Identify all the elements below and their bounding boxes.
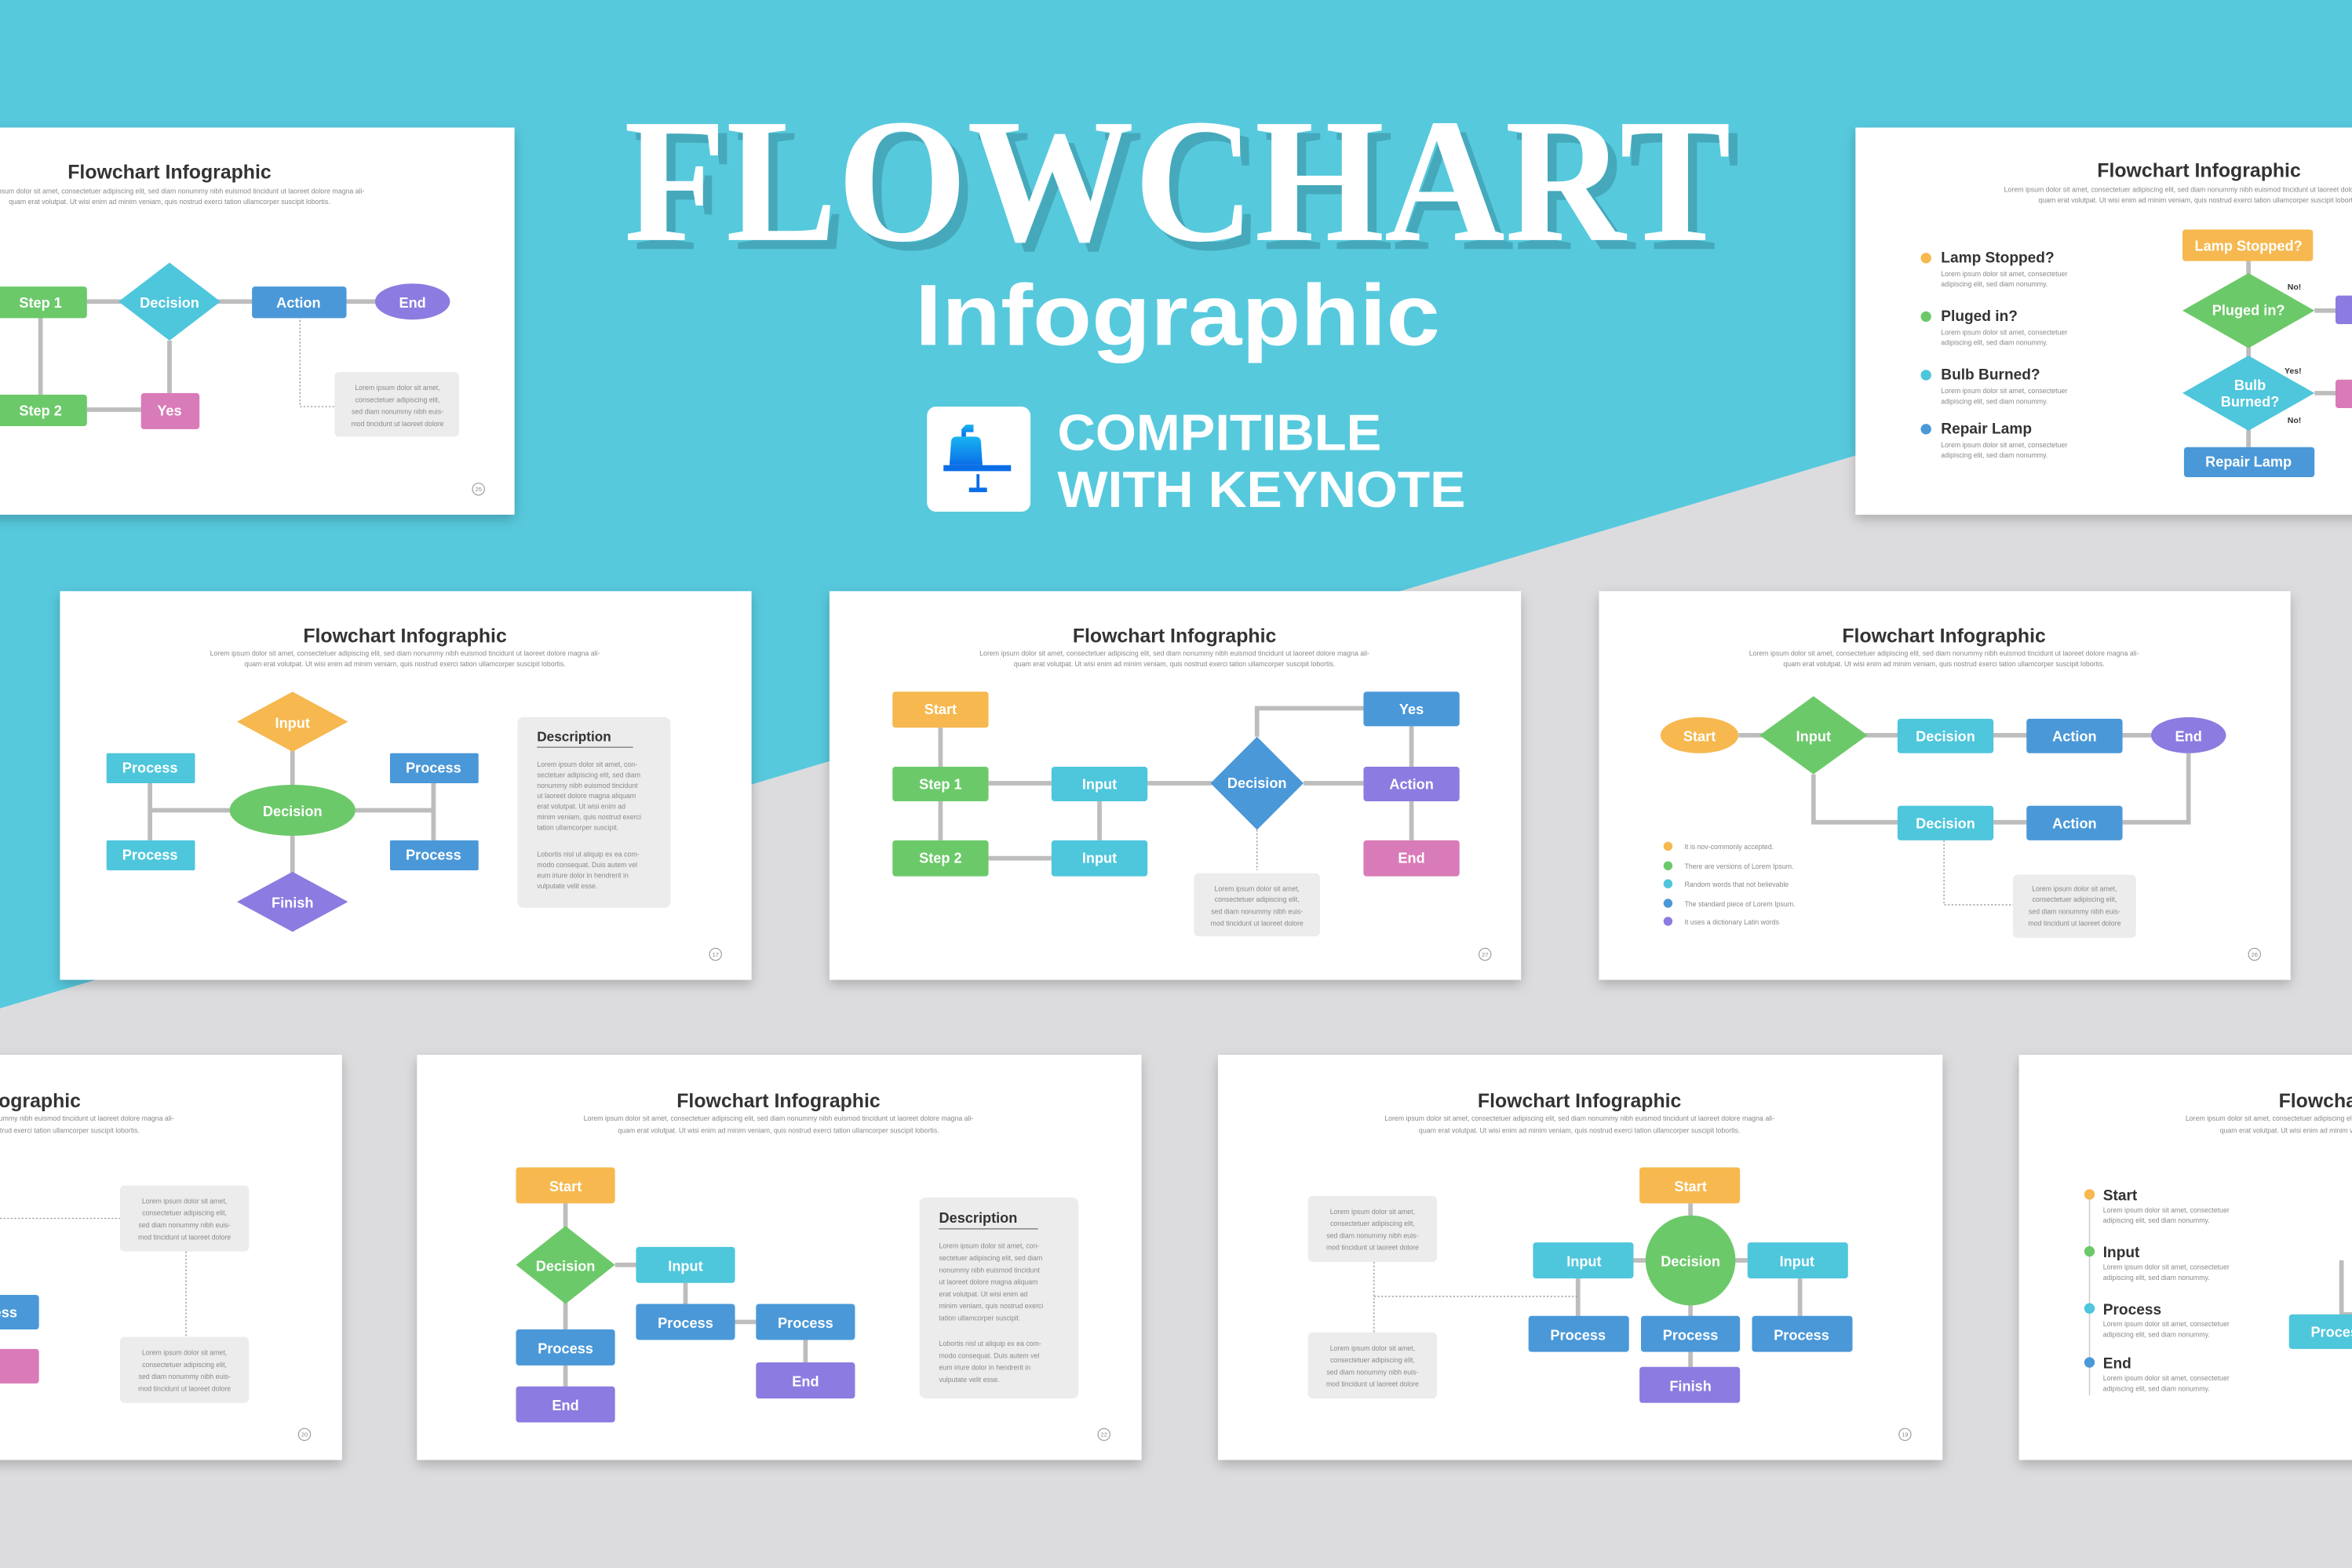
panel: top-right slide: Bulb [2234, 377, 2266, 393]
panel: row3 slide 2 (decision tree with description): eum iriure dolor in hendrerit in [939, 1364, 1030, 1372]
panel: row2 slide 3 (start-end loop) [1599, 591, 2291, 980]
panel: row3 slide 2 (decision tree with description): erat volutpat. Ut wisi enim ad [939, 1290, 1027, 1298]
panel: row3 slide 2 (decision tree with description): Lobortis nisl ut aliquip ex ea com- [939, 1340, 1041, 1347]
panel: row3 slide 1 (partial): 20 [301, 1431, 308, 1439]
panel: row3 slide 1 (partial): mod tincidunt ut laoreet dolore [138, 1384, 231, 1392]
panel: row2 slide 1 (decision hub): Lorem ipsum dolor sit amet, con- [537, 760, 637, 768]
panel: top-right slide: Bulb Burned? [1941, 367, 2040, 384]
panel: row2 slide 3 (start-end loop): Decision [1916, 815, 1975, 831]
panel: row3 slide 3 (decision circle): Flowchart Infographic [1478, 1091, 1682, 1112]
panel: row2 slide 3 (start-end loop): consectetuer adipiscing elit, [2032, 895, 2117, 903]
panel: row2 slide 1 (decision hub): sectetuer adipiscing elit, sed diam [537, 771, 640, 779]
panel: row2 slide 1 (decision hub): minim veniam, quis nostrud exerci [537, 813, 641, 821]
panel: row3 slide 2 (decision tree with description): End [792, 1374, 819, 1390]
panel: row3 slide 4 (partial timeline) [2019, 1055, 2352, 1460]
panel: row2 slide 1 (decision hub): Process [406, 760, 461, 776]
panel: top-right slide: Lorem ipsum dolor sit amet, consectetuer [1941, 270, 2067, 278]
panel: top-left slide: Step 1 [19, 295, 62, 311]
panel: row2 slide 1 (decision hub): modo consequat. Duis autem vel [537, 861, 637, 869]
panel: top-right slide: Pluged in? [1941, 308, 2018, 325]
panel: row3 slide 1 (partial): sed diam nonummy nibh euis- [139, 1221, 231, 1229]
panel: row3 slide 4 (partial timeline): adipiscing elit, sed diam nonummy. [2103, 1331, 2210, 1339]
panel: top-right slide: Flowchart Infographic [2097, 161, 2301, 182]
panel: top-left slide: 25 [475, 486, 482, 493]
panel: row3 slide 2 (decision tree with description): Input [668, 1258, 703, 1274]
panel: row3 slide 2 (decision tree with description): Description [939, 1210, 1017, 1226]
panel: top-right slide: adipiscing elit, sed diam nonummy. [1941, 451, 2048, 459]
panel: row3 slide 3 (decision circle): sed diam nonummy nibh euis- [1326, 1231, 1419, 1239]
panel: row2 slide 2 (steps): Input [1082, 777, 1117, 793]
panel: row2 slide 2 (steps): 27 [1482, 951, 1488, 958]
panel: row2 slide 3 (start-end loop): Action [2052, 729, 2097, 745]
panel: top-left slide: mod tincidunt ut laoreet dolore [351, 420, 444, 428]
panel: row3 slide 2 (decision tree with description): Lorem ipsum dolor sit amet, consectetuer adipiscing elit, sed diam nonummy nibh euismod tincidunt ut laoreet dolore magna ali- [584, 1114, 973, 1122]
panel: row3 slide 2 (decision tree with description): ut laoreet dolore magna aliquam [939, 1278, 1037, 1286]
panel: row2 slide 2 (steps): End [1398, 850, 1425, 866]
panel: row3 slide 3 (decision circle): sed diam nonummy nibh euis- [1326, 1368, 1419, 1376]
panel: row3 slide 4 (partial timeline): End [2103, 1356, 2131, 1373]
panel: row3 slide 1 (partial): consectetuer adipiscing elit, [142, 1361, 227, 1369]
panel: top-right slide: No! [2288, 416, 2301, 425]
panel: row2 slide 2 (steps): consectetuer adipiscing elit, [1215, 895, 1300, 903]
panel: row3 slide 3 (decision circle): Decision [1661, 1254, 1720, 1270]
panel: row3 slide 2 (decision tree with description): Flowchart Infographic [676, 1091, 881, 1112]
panel: top-left slide: Lorem ipsum dolor sit amet, [355, 384, 440, 392]
panel: row2 slide 2 (steps): quam erat volutpat. Ut wisi enim ad minim veniam, quis nostrud exerci tation ullamcorper suscipit lobortis. [1014, 660, 1335, 668]
panel: top-left slide: Flowchart Infographic [67, 162, 272, 184]
panel: row3 slide 1 (partial): Lorem ipsum dolor sit amet, [142, 1197, 227, 1205]
panel: row2 slide 1 (decision hub): Input [275, 715, 310, 731]
panel: row2 slide 3 (start-end loop): sed diam nonummy nibh euis- [2029, 907, 2120, 915]
panel: row3 slide 4 (partial timeline): Process [2103, 1302, 2161, 1318]
panel: row2 slide 1 (decision hub): Process [406, 848, 461, 863]
panel: row2 slide 1 (decision hub): erat volutpat. Ut wisi enim ad [537, 803, 625, 811]
panel: row2 slide 1 (decision hub): tation ullamcorper suscipit. [537, 823, 618, 831]
panel: row3 slide 1 (partial): mod tincidunt ut laoreet dolore [138, 1233, 231, 1241]
panel: row3 slide 2 (decision tree with description): 22 [1101, 1431, 1107, 1439]
panel: row2 slide 1 (decision hub): Lobortis nisl ut aliquip ex ea com- [537, 851, 640, 859]
panel: row2 slide 1 (decision hub): Process [122, 760, 177, 776]
panel: row3 slide 1 (partial): sed diam nonummy nibh euis- [139, 1373, 231, 1380]
panel: top-left slide: Decision [140, 295, 199, 311]
panel: top-right slide: Lorem ipsum dolor sit amet, consectetuer [1941, 387, 2067, 395]
panel: row2 slide 1 (decision hub): Lorem ipsum dolor sit amet, consectetuer adipiscing elit, sed diam nonummy nibh euismod tincidunt ut laoreet dolore magna ali- [210, 650, 600, 658]
panel: row2 slide 3 (start-end loop): It uses a dictionary Latin words [1684, 918, 1780, 926]
text: compatible with keynote: WITH KEYNOTE [1058, 461, 1465, 518]
panel: row3 slide 3 (decision circle) [1218, 1055, 1942, 1460]
panel: row2 slide 1 (decision hub): 17 [712, 951, 719, 958]
panel: row3 slide 3 (decision circle): Input [1566, 1254, 1602, 1270]
panel: row2 slide 3 (start-end loop): Decision [1916, 729, 1975, 745]
panel: row2 slide 3 (start-end loop): Lorem ipsum dolor sit amet, consectetuer adipiscing elit, sed diam nonummy nibh euismod tincidunt ut laoreet dolore magna ali- [1749, 650, 2139, 658]
panel: row3 slide 3 (decision circle): Process [1550, 1327, 1606, 1343]
panel: row2 slide 3 (start-end loop): End [2175, 729, 2202, 745]
panel: row3 slide 2 (decision tree with description): minim veniam, quis nostrud exerci [939, 1302, 1043, 1310]
panel: row3 slide 3 (decision circle): consectetuer adipiscing elit, [1330, 1220, 1415, 1227]
panel: row2 slide 2 (steps): Flowchart Infographic [1073, 625, 1276, 647]
panel: row2 slide 3 (start-end loop): 26 [2252, 951, 2258, 958]
panel: row2 slide 1 (decision hub): eum iriure dolor in hendrerit in [537, 871, 629, 879]
panel: row3 slide 4 (partial timeline): adipiscing elit, sed diam nonummy. [2103, 1274, 2210, 1282]
panel: row2 slide 1 (decision hub): Flowchart Infographic [303, 625, 507, 647]
panel: row2 slide 3 (start-end loop): Lorem ipsum dolor sit amet, [2032, 885, 2117, 893]
panel: row2 slide 1 (decision hub): quam erat volutpat. Ut wisi enim ad minim veniam, quis nostrud exerci tation ullamcorper suscipit lobortis. [244, 660, 566, 668]
panel: row2 slide 2 (steps): Decision [1227, 775, 1287, 791]
title: FLOWCHART: FLOWCHART [624, 82, 1731, 279]
panel: row2 slide 2 (steps): Yes [1399, 702, 1424, 717]
panel: row2 slide 2 (steps): Start [924, 702, 957, 717]
panel: row2 slide 3 (start-end loop): The standard piece of Lorem Ipsum. [1684, 900, 1795, 908]
panel: row2 slide 2 (steps): Step 2 [919, 850, 962, 866]
panel: top-left slide: sed diam nonummy nibh euis- [352, 408, 443, 416]
panel: top-right slide: quam erat volutpat. Ut wisi enim ad minim veniam, quis nostrud exerci tation ullamcorper suscipit lobortis. [2038, 196, 2352, 204]
panel: row3 slide 4 (partial timeline): Input [2103, 1245, 2140, 1261]
panel: row2 slide 1 (decision hub): Description [537, 729, 611, 745]
panel: row3 slide 3 (decision circle): Lorem ipsum dolor sit amet, [1330, 1208, 1415, 1216]
title: FLOWCHART: FLOWCHART [633, 91, 1740, 287]
panel: row3 slide 3 (decision circle): mod tincidunt ut laoreet dolore [1326, 1380, 1419, 1388]
panel: top-right slide: Lamp Stopped? [2195, 238, 2303, 253]
panel: row3 slide 4 (partial timeline): Lorem ipsum dolor sit amet, consectetuer [2103, 1264, 2230, 1271]
panel: row3 slide 3 (decision circle): consectetuer adipiscing elit, [1330, 1356, 1415, 1364]
panel: row3 slide 3 (decision circle): Process [1774, 1327, 1829, 1343]
panel: row2 slide 2 (steps): Action [1389, 777, 1434, 793]
panel: row3 slide 3 (decision circle): Lorem ipsum dolor sit amet, [1330, 1344, 1415, 1352]
panel: row3 slide 3 (decision circle): Process [1663, 1327, 1718, 1343]
panel: row3 slide 3 (decision circle): 19 [1902, 1431, 1909, 1439]
panel: row3 slide 3 (decision circle): Lorem ipsum dolor sit amet, consectetuer adipiscing elit, sed diam nonummy nibh euismod tincidunt ut laoreet dolore magna ali- [1384, 1114, 1774, 1122]
panel: top-right slide: Lamp Stopped? [1941, 250, 2055, 267]
panel: row2 slide 2 (steps): Step 1 [919, 777, 962, 793]
panel: top-right slide: No! [2288, 283, 2301, 292]
panel: row3 slide 2 (decision tree with description): Process [778, 1315, 833, 1331]
panel: row3 slide 3 (decision circle): Start [1674, 1179, 1707, 1194]
panel: top-right slide: adipiscing elit, sed diam nonummy. [1941, 397, 2048, 405]
panel: row2 slide 3 (start-end loop): There are versions of Lorem Ipsum. [1684, 862, 1794, 870]
panel: row3 slide 3 (decision circle): mod tincidunt ut laoreet dolore [1326, 1244, 1419, 1252]
panel: top-right slide: Burned? [2221, 394, 2279, 410]
panel: row3 slide 2 (decision tree with description): nonummy nibh euismod tincidunt [939, 1266, 1040, 1274]
panel: row3 slide 2 (decision tree with description): vulputate velit esse. [939, 1376, 1000, 1384]
panel: row2 slide 1 (decision hub): ut laoreet dolore magna aliquam [537, 792, 636, 800]
panel: top-left slide [0, 128, 515, 515]
panel: top-left slide: consectetuer adipiscing elit, [356, 396, 439, 403]
panel: row3 slide 4 (partial timeline): Start [2103, 1188, 2138, 1205]
panel: row2 slide 3 (start-end loop): Start [1683, 729, 1716, 745]
panel: row3 slide 4 (partial timeline): Lorem ipsum dolor sit amet, consectetuer [2103, 1374, 2230, 1382]
panel: row3 slide 2 (decision tree with description): modo consequat. Duis autem vel [939, 1351, 1039, 1359]
text: compatible with keynote: COMPITIBLE [1058, 404, 1381, 461]
panel: row2 slide 2 (steps): Lorem ipsum dolor sit amet, consectetuer adipiscing elit, sed diam nonummy nibh euismod tincidunt ut laoreet dolore magna ali- [979, 650, 1369, 658]
panel: top-right slide: adipiscing elit, sed diam nonummy. [1941, 339, 2048, 347]
panel: row3 slide 4 (partial timeline): adipiscing elit, sed diam nonummy. [2103, 1216, 2210, 1224]
subtitle: Infographic: Infographic [915, 268, 1440, 364]
panel: row3 slide 2 (decision tree with description): tation ullamcorper suscipit. [939, 1315, 1020, 1322]
panel: row3 slide 2 (decision tree with description): quam erat volutpat. Ut wisi enim ad minim veniam, quis nostrud exerci tation ullamcorper suscipit lobortis. [618, 1127, 939, 1135]
panel: row3 slide 3 (decision circle): Finish [1669, 1378, 1712, 1394]
panel: top-right slide: Lorem ipsum dolor sit amet, consectetuer [1941, 441, 2067, 449]
panel: top-right slide: Lorem ipsum dolor sit amet, consectetuer [1941, 328, 2067, 336]
panel: row2 slide 1 (decision hub) [60, 591, 752, 980]
panel: row2 slide 3 (start-end loop): quam erat volutpat. Ut wisi enim ad minim veniam, quis nostrud exerci tation ullamcorper suscipit lobortis. [1783, 660, 2105, 668]
panel: row3 slide 1 (partial) [0, 1055, 342, 1460]
text: compatible with keynote [1058, 404, 1465, 518]
panel: top-left slide: End [399, 295, 426, 311]
panel: row3 slide 4 (partial timeline): adipiscing elit, sed diam nonummy. [2103, 1384, 2210, 1392]
panel: row3 slide 2 (decision tree with description) [417, 1055, 1142, 1460]
panel: row3 slide 1 (partial): Lorem ipsum dolor sit amet, [142, 1349, 227, 1357]
panel: row3 slide 1 (partial): consectetuer adipiscing elit, [142, 1209, 227, 1217]
panel: row2 slide 2 (steps): sed diam nonummy nibh euis- [1211, 907, 1303, 915]
panel: row2 slide 1 (decision hub): vulputate velit esse. [537, 882, 597, 890]
panel: row3 slide 2 (decision tree with description): sectetuer adipiscing elit, sed diam [939, 1254, 1042, 1262]
panel: top-right slide [1855, 128, 2352, 515]
panel: row3 slide 2 (decision tree with description): Lorem ipsum dolor sit amet, con- [939, 1242, 1039, 1250]
panel: row2 slide 3 (start-end loop): mod tincidunt ut laoreet dolore [2028, 920, 2121, 928]
panel: row2 slide 1 (decision hub): Decision [263, 804, 323, 819]
panel: top-right slide: Pluged in? [2212, 303, 2285, 319]
icon: keynote [927, 407, 1030, 512]
panel: top-right slide: Yes! [2285, 366, 2302, 376]
panel: row2 slide 3 (start-end loop): Flowchart Infographic [1842, 625, 2046, 647]
panel: row2 slide 3 (start-end loop): It is nov-commonly accepted. [1684, 843, 1774, 851]
panel: row2 slide 1 (decision hub): Finish [272, 895, 313, 911]
panel: row3 slide 2 (decision tree with description): Decision [536, 1258, 595, 1274]
panel: row2 slide 3 (start-end loop): Input [1796, 729, 1831, 745]
panel: top-left slide: Step 2 [19, 403, 62, 419]
panel: row3 slide 3 (decision circle): Input [1780, 1254, 1814, 1270]
panel: row2 slide 3 (start-end loop): Random words that not believable [1684, 881, 1789, 888]
panel: row3 slide 3 (decision circle): quam erat volutpat. Ut wisi enim ad minim veniam, quis nostrud exerci tation ullamcorper suscipit lobortis. [1419, 1127, 1740, 1135]
panel: top-right slide: Repair Lamp [2205, 454, 2292, 470]
panel: row2 slide 2 (steps): mod tincidunt ut laoreet dolore [1211, 920, 1304, 928]
panel: top-right slide: adipiscing elit, sed diam nonummy. [1941, 280, 2048, 288]
panel: row2 slide 2 (steps) [830, 591, 1521, 980]
panel: row2 slide 1 (decision hub): nonummy nibh euismod tincidunt [537, 782, 638, 789]
panel: row3 slide 2 (decision tree with description): Start [549, 1179, 582, 1194]
panel: top-right slide: Repair Lamp [1941, 421, 2032, 438]
panel: row3 slide 2 (decision tree with description): Process [658, 1315, 713, 1331]
panel: row3 slide 4 (partial timeline): Lorem ipsum dolor sit amet, consectetuer [2103, 1206, 2230, 1214]
panel: top-left slide: quam erat volutpat. Ut wisi enim ad minim veniam, quis nostrud exerci tation ullamcorper suscipit lobortis. [9, 198, 330, 206]
panel: row2 slide 3 (start-end loop): Action [2052, 815, 2097, 831]
panel: row2 slide 2 (steps): Input [1082, 850, 1117, 866]
panel: top-left slide: Yes [157, 403, 182, 419]
panel: top-left slide: Action [276, 295, 321, 311]
panel: row2 slide 1 (decision hub): Process [122, 848, 177, 863]
panel: row2 slide 2 (steps): Lorem ipsum dolor sit amet, [1215, 885, 1300, 893]
panel: row3 slide 2 (decision tree with description): Process [538, 1341, 593, 1357]
panel: row3 slide 2 (decision tree with description): End [552, 1398, 579, 1413]
panel: row3 slide 4 (partial timeline): Lorem ipsum dolor sit amet, consectetuer [2103, 1320, 2230, 1328]
